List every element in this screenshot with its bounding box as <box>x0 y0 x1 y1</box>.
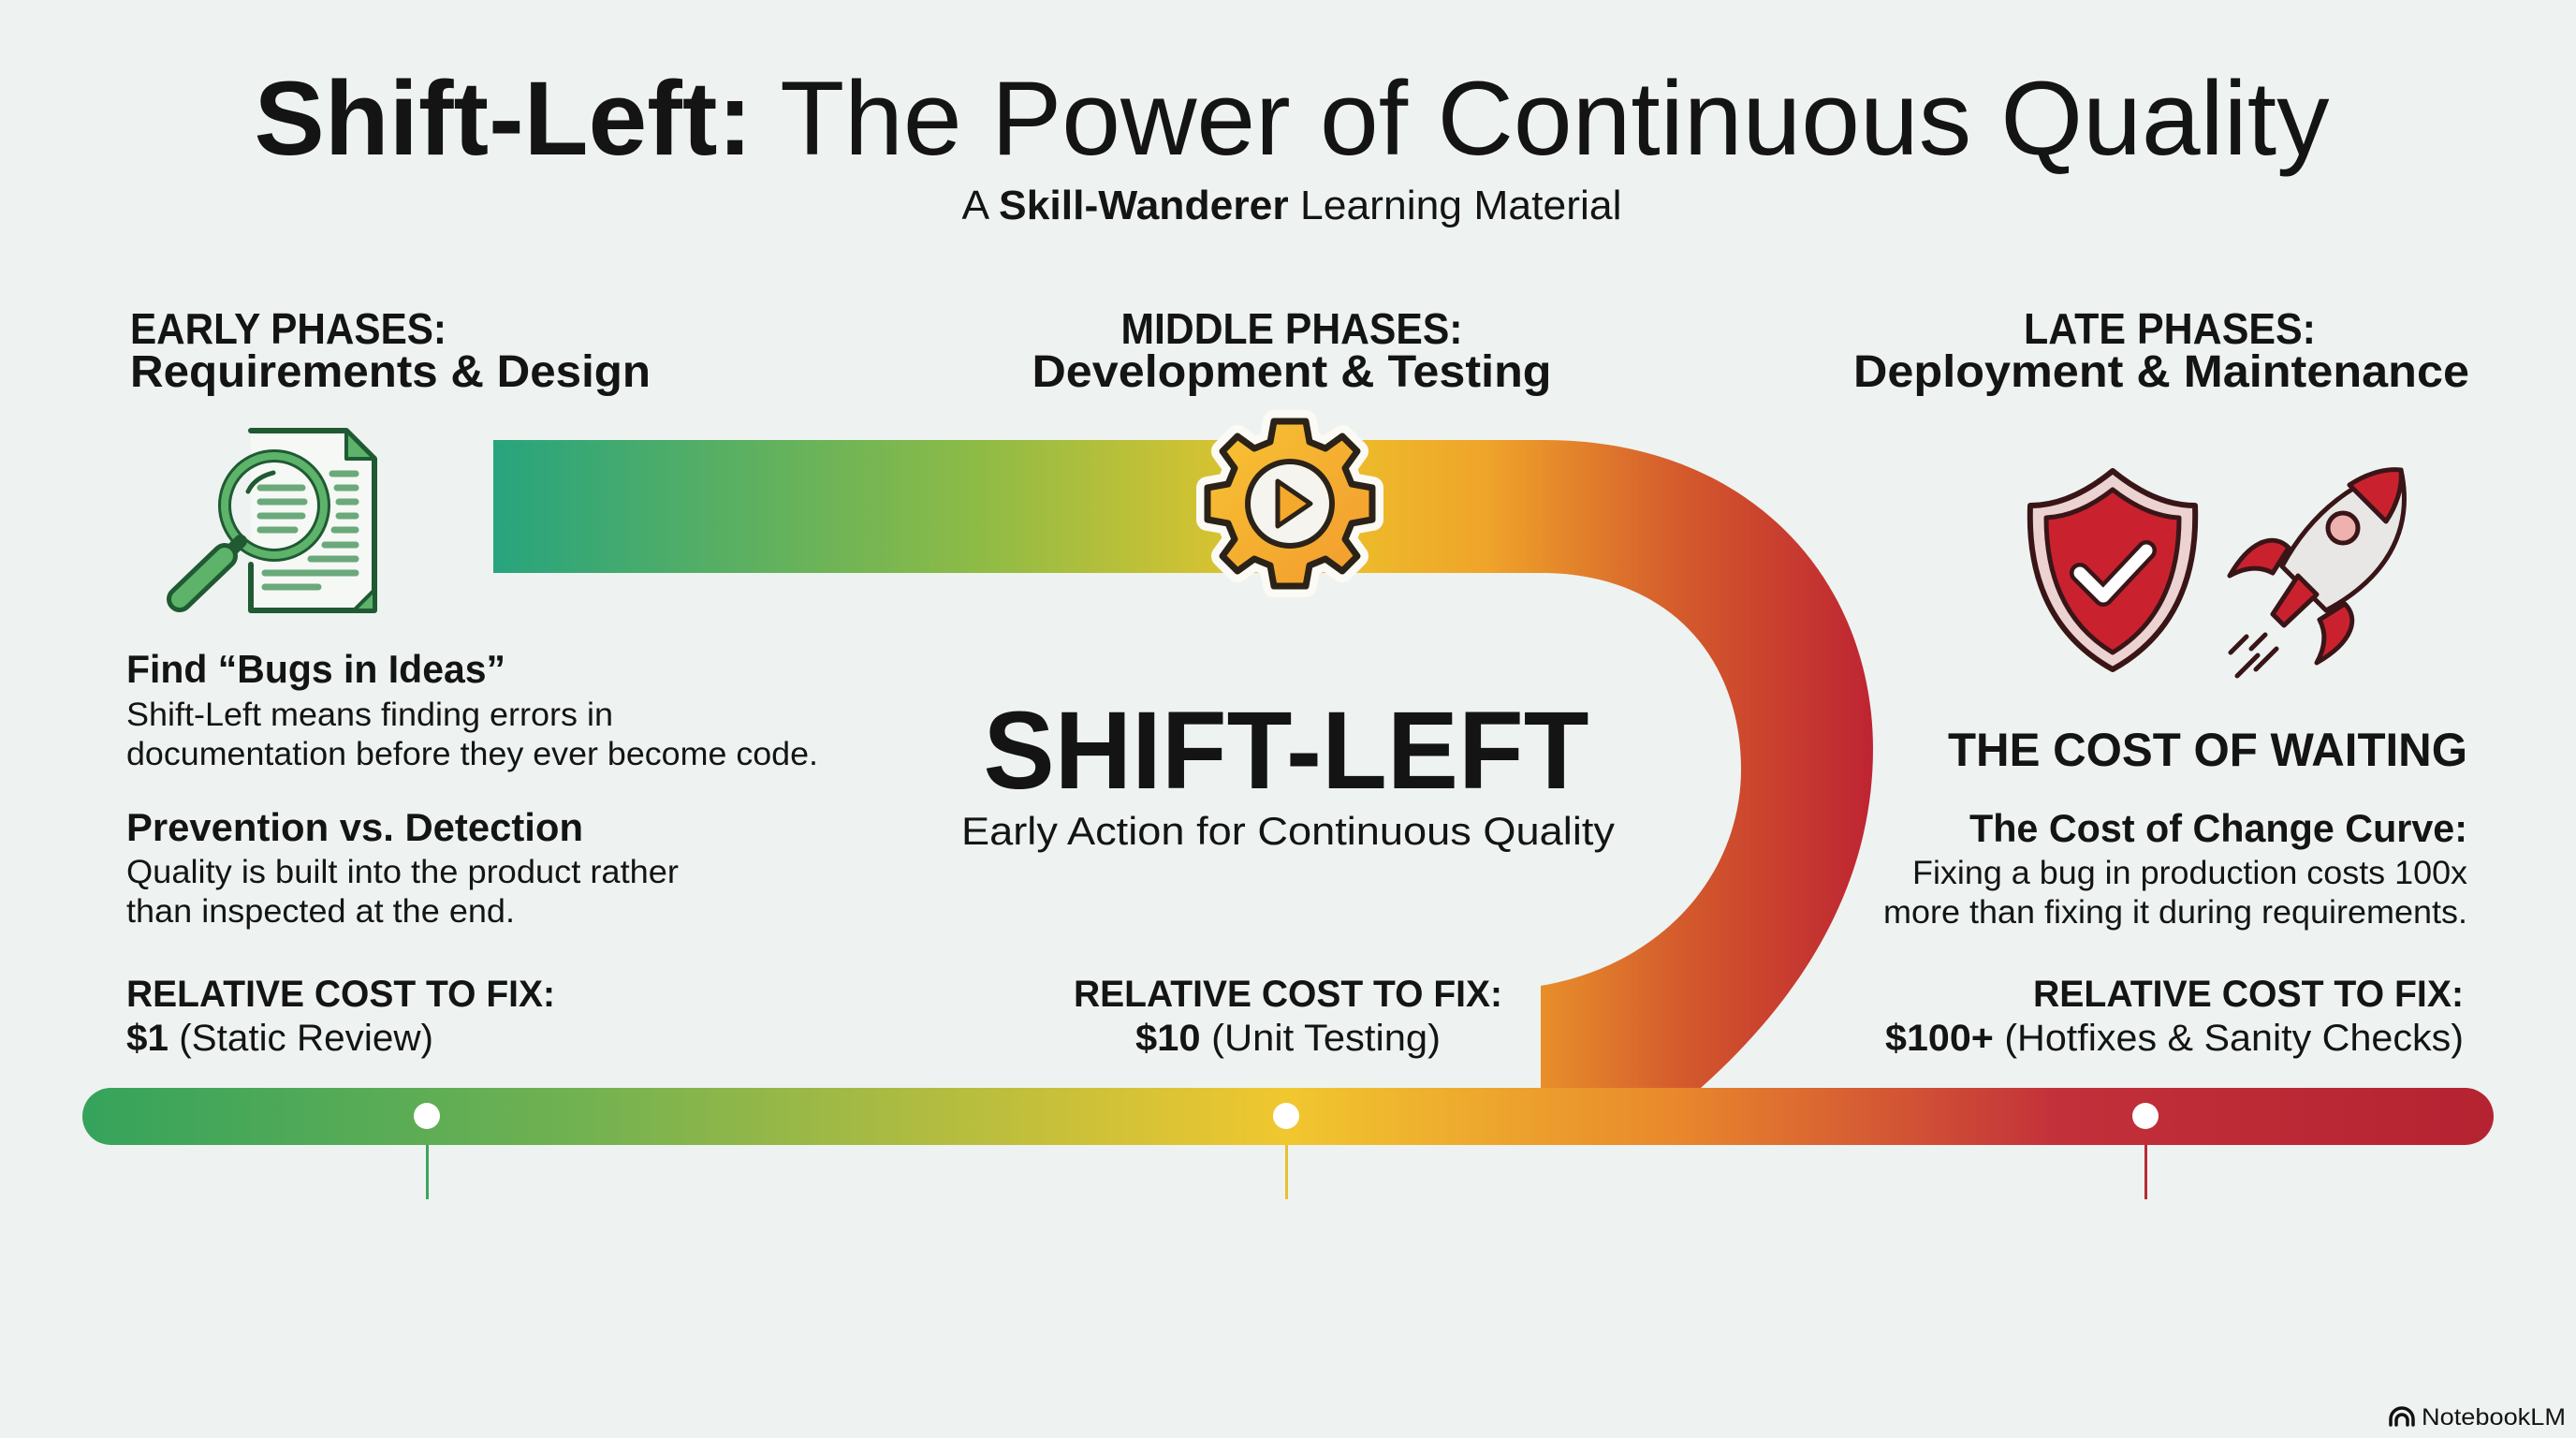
text block: prevention vs detection: Prevention vs. Detection <box>126 805 583 849</box>
center label: shift-left: SHIFT-LEFT <box>983 689 1589 813</box>
text block: prevention vs detection <box>126 805 679 930</box>
text block: cost of waiting: more than fixing it during requirements. <box>1883 894 2467 931</box>
icon: shield with check <box>2030 471 2195 669</box>
cost: late: $100+ (Hotfixes & Sanity Checks) <box>1885 1018 2464 1059</box>
text block: bugs in ideas: documentation before they ever become code. <box>126 736 818 772</box>
icon: rocket <box>2230 470 2404 676</box>
cost: early <box>126 974 555 1059</box>
text block: cost of waiting: THE COST OF WAITING <box>1948 724 2467 776</box>
text block: cost of waiting <box>1883 724 2468 931</box>
title: Shift-Left: The Power of Continuous Quality <box>255 60 2329 177</box>
text block: prevention vs detection: Quality is built into the product rather <box>126 854 679 890</box>
heading: middle phases <box>1032 304 1552 397</box>
subtitle: A Skill-Wanderer Learning Material <box>962 183 1621 228</box>
text block: cost of waiting: Fixing a bug in production costs 100x <box>1912 855 2468 891</box>
cost: late <box>1885 974 2464 1059</box>
marker: middle <box>1273 1103 1299 1199</box>
cost: early: RELATIVE COST TO FIX: <box>126 974 555 1015</box>
icon: gear with play <box>1208 421 1372 586</box>
cost: late: RELATIVE COST TO FIX: <box>2033 974 2464 1015</box>
heading: middle phases: Development & Testing <box>1032 347 1552 397</box>
cost: middle: RELATIVE COST TO FIX: <box>1074 974 1502 1015</box>
watermark: NotebookLM: NotebookLM <box>2422 1404 2566 1431</box>
heading: early phases: EARLY PHASES: <box>130 304 446 353</box>
cost: middle <box>1074 974 1502 1059</box>
cost: middle: $10 (Unit Testing) <box>1135 1018 1441 1059</box>
text block: bugs in ideas: Find “Bugs in Ideas” <box>126 647 505 691</box>
heading: early phases: Requirements & Design <box>130 347 651 397</box>
heading: late phases: Deployment & Maintenance <box>1853 347 2469 397</box>
heading: middle phases: MIDDLE PHASES: <box>1121 304 1462 353</box>
shift-left curve band <box>493 440 1873 1088</box>
heading: late phases <box>1853 304 2469 397</box>
marker: early <box>414 1103 440 1199</box>
text block: bugs in ideas <box>126 647 818 772</box>
heading: late phases: LATE PHASES: <box>2024 304 2316 353</box>
center label: shift-left: Early Action for Continuous Quality <box>961 809 1615 853</box>
text block: cost of waiting: The Cost of Change Curve: <box>1969 806 2467 850</box>
text block: bugs in ideas: Shift-Left means finding errors in <box>126 697 613 733</box>
text block: prevention vs detection: than inspected at the end. <box>126 893 515 930</box>
icon: document with magnifier <box>180 431 374 610</box>
marker: late <box>2132 1103 2159 1199</box>
bottom timeline bar <box>82 1088 2494 1199</box>
cost: early: $1 (Static Review) <box>126 1018 433 1059</box>
heading: early phases <box>130 304 651 397</box>
